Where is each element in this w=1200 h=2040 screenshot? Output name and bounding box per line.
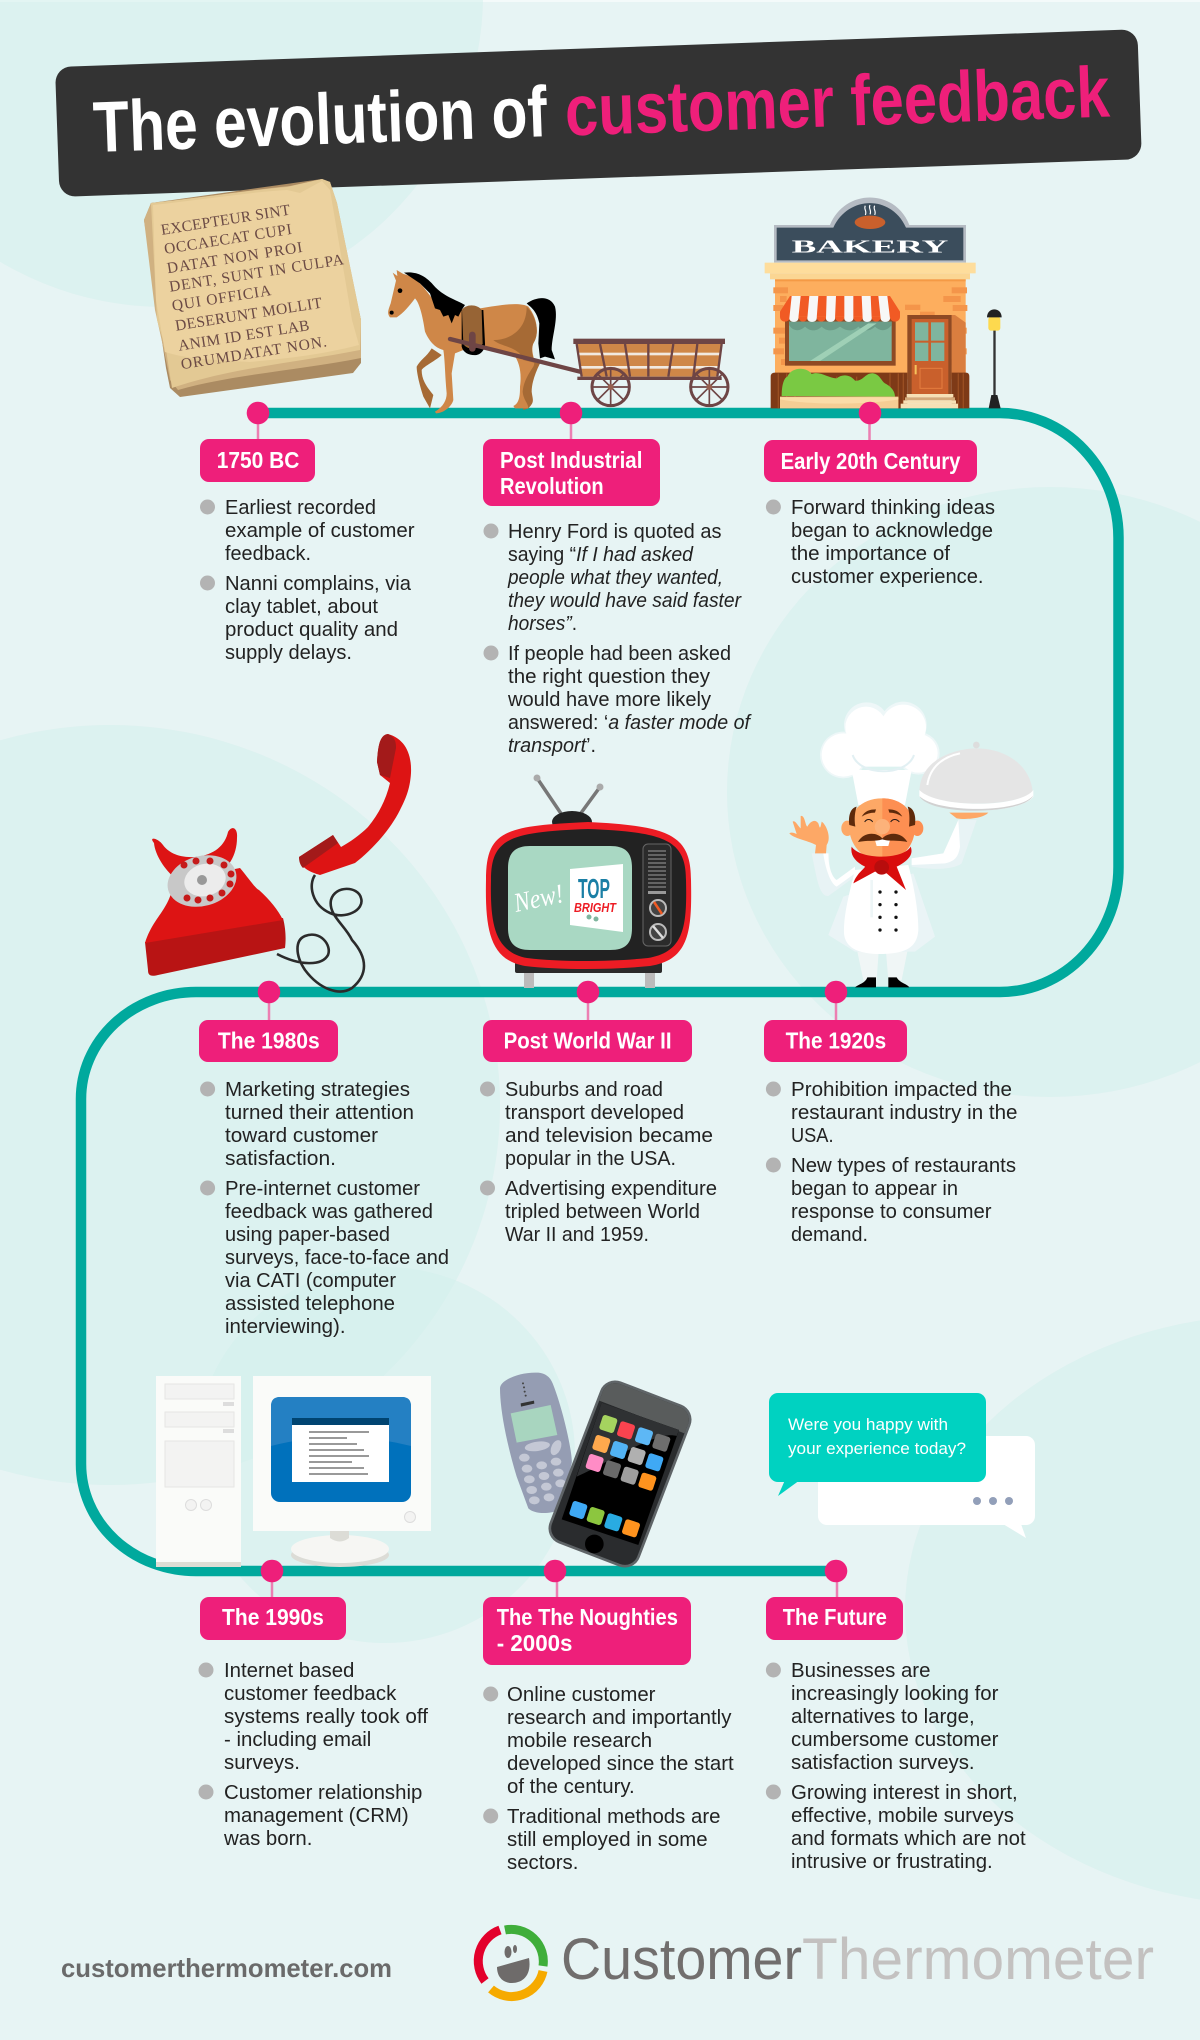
body text: The 1980s: Pre-internet customer	[225, 1178, 420, 1200]
body text: Post Industrial Revolution: the right question they	[508, 666, 711, 688]
label: The 1920s	[764, 1020, 907, 1062]
body text: Early 20th Century: the importance of	[791, 543, 950, 565]
body text: Post Industrial Revolution: answered: ‘a faster mode of	[508, 712, 752, 734]
body text: The 1980s: interviewing).	[225, 1316, 346, 1338]
label: The Future	[766, 1597, 903, 1640]
body text: Post World War II: Advertising expenditure	[505, 1178, 717, 1200]
body text: The Future: satisfaction surveys.	[791, 1752, 975, 1774]
survey question bubble: your experience today?	[788, 1439, 966, 1458]
logo: Customer Thermometer	[478, 1927, 1154, 1997]
label: The 1920s: The 1920s	[786, 1028, 886, 1054]
body text: The Noughties	[483, 1684, 734, 1874]
body text: The Noughties: sectors.	[507, 1852, 578, 1874]
body text: The Future: increasingly looking for	[791, 1683, 999, 1705]
body text: The 1980s: satisfaction.	[225, 1148, 336, 1170]
body text: The 1980s: turned their attention	[225, 1102, 414, 1124]
body text: Post Industrial Revolution: would have more likely	[507, 689, 712, 711]
body text: The 1920s: Prohibition impacted the	[791, 1079, 1012, 1101]
body text: The 1980s: using paper-based	[225, 1224, 390, 1246]
product box	[570, 864, 623, 932]
tablet inscription	[160, 202, 346, 373]
body text: Post World War II: and television became	[505, 1125, 713, 1147]
body text: Post Industrial Revolution: people what they wanted,	[507, 567, 723, 589]
body text: The 1920s: restaurant industry in the	[791, 1102, 1018, 1124]
body text: The Noughties: Traditional methods are	[507, 1806, 720, 1828]
body text: The 1990s: customer feedback	[224, 1683, 397, 1705]
label: 1750 BC: 1750 BC	[217, 447, 299, 473]
body text: The 1990s: Internet based	[224, 1660, 354, 1682]
body text: The Future: and formats which are not	[791, 1828, 1026, 1850]
body text: Post World War II: tripled between World	[505, 1201, 700, 1223]
tablet inscription: QUI OFFICIA	[171, 282, 273, 315]
tablet inscription: DENT, SUNT IN CULPA	[168, 251, 346, 296]
survey question bubble: Were you happy with	[788, 1415, 948, 1434]
icon: rotary telephone	[145, 734, 411, 991]
body text: Post World War II: Suburbs and road	[505, 1079, 663, 1101]
body text: Early 20th Century: customer experience.	[791, 566, 984, 588]
body text: The Future: cumbersome customer	[791, 1729, 999, 1751]
panel: The 1920s	[764, 1020, 1018, 1246]
body text: The Future	[766, 1660, 1026, 1873]
logo wordmark	[561, 1927, 1154, 1992]
tablet inscription: ORUMDATAT NON.	[180, 333, 328, 373]
panel: Post Industrial Revolution	[483, 439, 752, 757]
body text: The Future: Businesses are	[791, 1660, 930, 1682]
body text: The Noughties: still employed in some	[507, 1829, 708, 1851]
label: Post World War II: Post World War II	[504, 1028, 672, 1054]
body text: 1750 BC: clay tablet, about	[225, 596, 378, 618]
footer url: customerthermometer.com	[61, 1953, 392, 1983]
body text: Post Industrial Revolution	[484, 521, 752, 757]
label: 1750 BC	[200, 439, 315, 482]
body text: Early 20th Century: Forward thinking ideas	[791, 497, 995, 519]
title text	[92, 53, 1112, 168]
body text: Post Industrial Revolution: horses”.	[508, 613, 577, 635]
panel: The Noughties	[483, 1597, 734, 1874]
body text: The 1980s: toward customer	[225, 1125, 378, 1147]
product box: TOP	[578, 873, 610, 904]
body text: Post Industrial Revolution: they would have said faster	[508, 590, 742, 612]
icon: clay tablet	[144, 179, 361, 397]
body text: The 1920s	[766, 1079, 1018, 1246]
body text: The 1980s	[200, 1079, 449, 1338]
label: Early 20th Century	[764, 440, 977, 482]
icon: chat bubbles	[769, 1393, 1035, 1538]
tablet inscription: ANIM ID EST LAB	[177, 317, 311, 355]
body text: 1750 BC	[200, 497, 415, 664]
icon: bakery shop	[765, 197, 1002, 408]
body text: The Noughties: mobile research	[507, 1730, 652, 1752]
label: Post World War II	[483, 1020, 692, 1062]
label: The 1990s: The 1990s	[222, 1604, 324, 1630]
body text: Post Industrial Revolution: saying “If I had asked	[508, 544, 694, 566]
label: The The Noughties - 2000s: - 2000s	[497, 1630, 572, 1656]
smartphone	[544, 1376, 696, 1572]
panel: 1750 BC	[200, 439, 415, 664]
body text: The 1990s	[198, 1660, 428, 1850]
survey reply bubble	[818, 1436, 1035, 1538]
title text: The evolution of	[92, 72, 549, 168]
icon: chef with cloche	[789, 702, 1033, 987]
label: Early 20th Century: Early 20th Century	[781, 448, 960, 474]
body text: 1750 BC: supply delays.	[225, 642, 352, 664]
body text: The 1990s: management (CRM)	[224, 1805, 409, 1827]
body text: The 1990s: - including email	[224, 1729, 371, 1751]
body text: Post Industrial Revolution: transport’.	[508, 735, 596, 757]
body text: 1750 BC: feedback.	[225, 543, 311, 565]
body text: Early 20th Century	[766, 497, 995, 588]
body text: The 1980s: surveys, face-to-face and	[225, 1247, 449, 1269]
label: Post Industrial Revolution: Revolution	[500, 473, 604, 499]
panel: The 1980s	[199, 1020, 449, 1338]
body text: Post World War II	[480, 1079, 717, 1246]
panel: The 1990s	[198, 1597, 428, 1850]
tablet inscription: OCCAECAT CUPI	[163, 221, 293, 258]
icon: desktop computer	[156, 1376, 431, 1567]
icon: horse and cart	[388, 270, 728, 413]
body text: Post Industrial Revolution: Henry Ford is quoted as	[508, 521, 722, 543]
body text: The 1980s: Marketing strategies	[225, 1079, 410, 1101]
icon: bakery shop: BAKERY	[792, 236, 948, 256]
survey question bubble	[769, 1393, 986, 1496]
body text: The Noughties: Online customer	[507, 1684, 656, 1706]
body text: The Future: alternatives to large,	[791, 1706, 975, 1728]
telephone cord	[277, 875, 364, 991]
panel: Post World War II	[480, 1020, 717, 1246]
body text: The 1920s: response to consumer	[791, 1201, 992, 1223]
body text: 1750 BC: Nanni complains, via	[225, 573, 412, 595]
body text: 1750 BC: product quality and	[225, 619, 398, 641]
tablet inscription: DESERUNT MOLLIT	[174, 295, 324, 335]
label: The 1990s	[200, 1597, 346, 1640]
label: The The Noughties - 2000s	[483, 1597, 691, 1665]
body text: The Future: Growing interest in short,	[791, 1782, 1018, 1804]
body text: The Noughties: research and importantly	[507, 1707, 732, 1729]
panel: Early 20th Century	[764, 440, 995, 588]
tablet inscription: EXCEPTEUR SINT	[160, 202, 292, 239]
body text: The Noughties: developed since the start	[507, 1753, 734, 1775]
body text: The 1920s: began to appear in	[791, 1178, 958, 1200]
logo wordmark: Customer	[561, 1927, 802, 1992]
timeline path	[81, 413, 1118, 1571]
body text: The Future: effective, mobile surveys	[791, 1805, 1014, 1827]
timeline markers	[247, 402, 881, 1598]
body text: Post Industrial Revolution: If people had been asked	[508, 643, 731, 665]
body text: The 1920s: demand.	[791, 1224, 868, 1246]
logo ring and face	[478, 1929, 543, 1997]
label: Post Industrial Revolution: Post Industrial	[500, 447, 642, 473]
body text: The 1980s: assisted telephone	[225, 1293, 395, 1315]
body text: The 1990s: was born.	[223, 1828, 312, 1850]
label: The 1980s: The 1980s	[218, 1028, 320, 1054]
label: The Future: The Future	[783, 1604, 887, 1630]
body text: The 1990s: Customer relationship	[224, 1782, 422, 1804]
body text: The 1920s: New types of restaurants	[791, 1155, 1016, 1177]
icon: handset	[299, 734, 411, 875]
body text: Early 20th Century: began to acknowledge	[791, 520, 993, 542]
label: The 1980s	[199, 1020, 338, 1062]
feature phone	[500, 1373, 572, 1513]
body text: The 1920s: USA.	[791, 1125, 834, 1147]
label: Post Industrial Revolution	[483, 439, 660, 506]
body text: Post World War II: War II and 1959.	[505, 1224, 649, 1246]
product box: BRIGHT	[574, 900, 617, 915]
icon: mobile phones	[500, 1373, 696, 1572]
body text: The 1980s: feedback was gathered	[225, 1201, 433, 1223]
body text: 1750 BC: Earliest recorded	[225, 497, 376, 519]
body text: The 1980s: via CATI (computer	[225, 1270, 396, 1292]
panel: The Future	[766, 1597, 1026, 1873]
body text: Post World War II: transport developed	[505, 1102, 684, 1124]
body text: The Noughties: of the century.	[507, 1776, 635, 1798]
tablet inscription: DATAT NON PROI	[166, 239, 304, 277]
label: The The Noughties - 2000s: The The Noughties	[497, 1604, 678, 1630]
body text: 1750 BC: example of customer	[225, 520, 415, 542]
body text: The Future: intrusive or frustrating.	[791, 1851, 993, 1873]
body text: The 1990s: systems really took off	[224, 1706, 428, 1728]
title banner	[55, 29, 1142, 197]
body text: The 1990s: surveys.	[224, 1752, 300, 1774]
icon: retro television: New!	[510, 878, 566, 918]
icon: retro television	[486, 774, 691, 988]
logo wordmark: Thermometer	[802, 1927, 1154, 1992]
body text: Post World War II: popular in the USA.	[505, 1148, 676, 1170]
